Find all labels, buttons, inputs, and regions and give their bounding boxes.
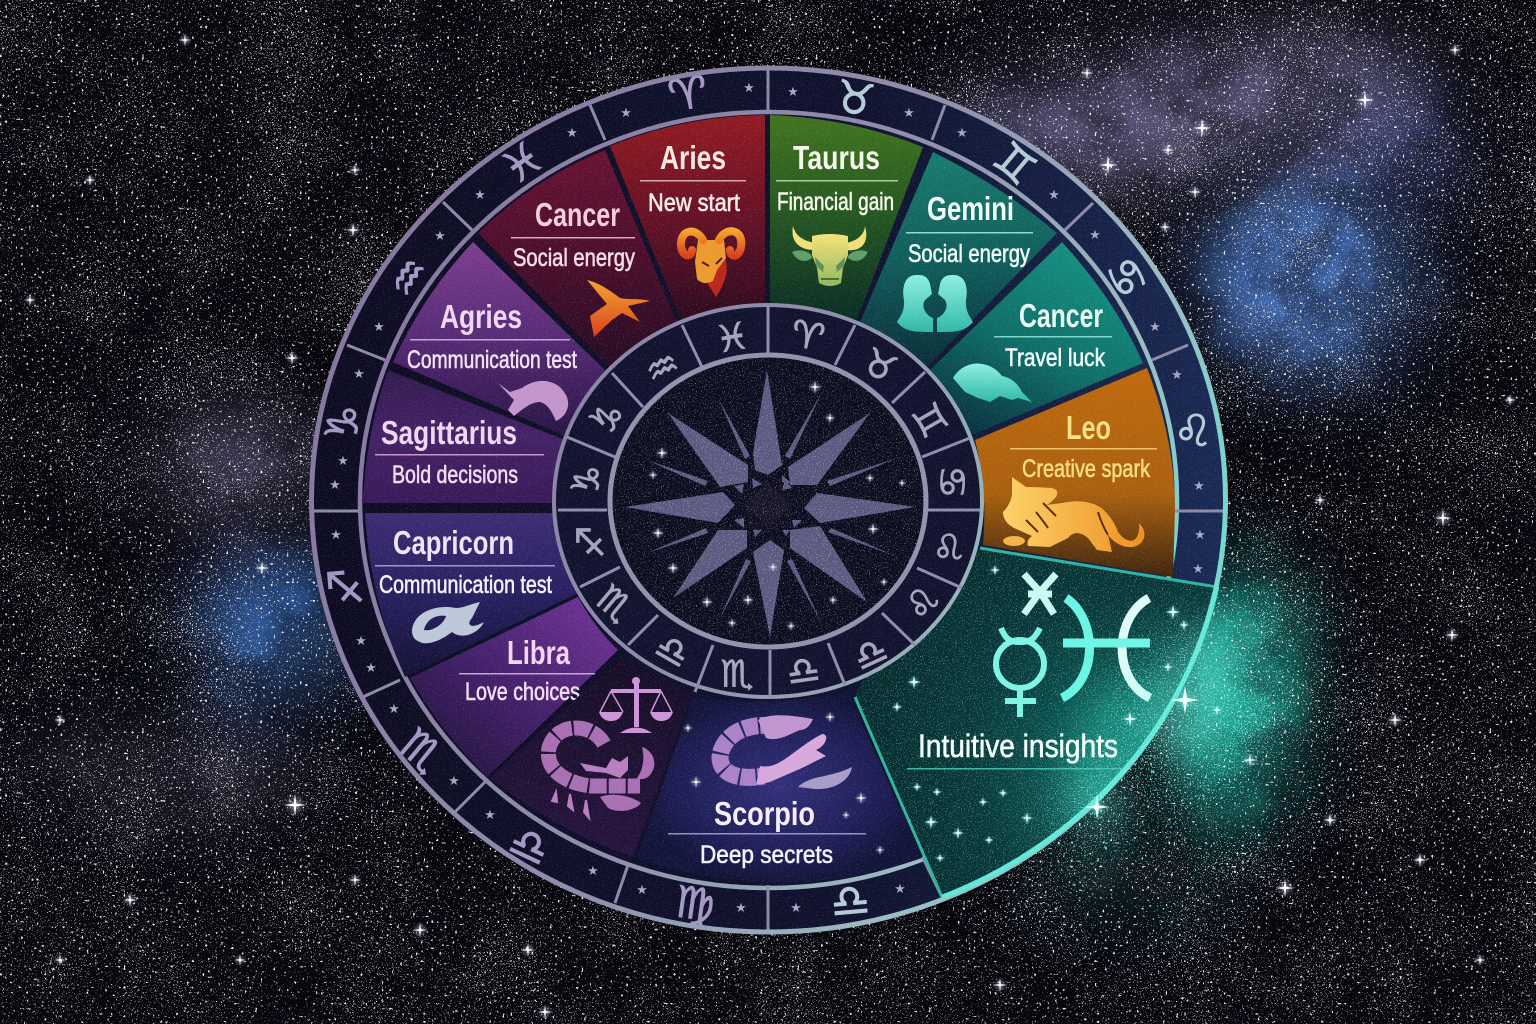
segment: Scorpio: Deep secrets xyxy=(700,841,833,869)
segment: Scorpio: Scorpio xyxy=(714,795,815,832)
middle ring zodiac glyphs: ♑ xyxy=(581,391,634,446)
outer glyph ring: ★ xyxy=(620,106,632,121)
segment: Cancer (teal): Travel luck xyxy=(1005,344,1105,372)
outer ring zodiac glyphs: ♋ xyxy=(1094,248,1158,308)
middle ring zodiac glyphs: ♌ xyxy=(927,524,970,574)
icon: lobster xyxy=(720,715,852,789)
outer glyph ring: ★ xyxy=(787,85,799,100)
middle ring zodiac glyphs: ♏ xyxy=(720,652,754,695)
outer glyph ring: ★ xyxy=(587,864,599,879)
segment: Sagittarius: Sagittarius xyxy=(381,414,517,451)
outer glyph ring xyxy=(312,66,1226,933)
outer ring zodiac glyphs: ♓ xyxy=(492,131,554,195)
segment: Scorpion xyxy=(490,655,692,857)
segment: Cancer (red): Social energy xyxy=(513,244,635,272)
segment: Gemini: Gemini xyxy=(927,190,1014,227)
outer glyph ring: ★ xyxy=(388,702,400,717)
middle ring zodiac glyphs: ♒ xyxy=(638,341,686,394)
outer glyph ring: ★ xyxy=(735,901,747,916)
icon: symbol xyxy=(1024,574,1056,614)
outer glyph ring: ★ xyxy=(790,901,802,916)
middle ring zodiac glyphs: ♌ xyxy=(896,578,950,629)
segment: Agries xyxy=(393,242,607,437)
icon: compass star xyxy=(625,370,915,637)
segment: Capricorn xyxy=(365,513,578,677)
outer glyph ring: ★ xyxy=(1171,368,1183,383)
middle glyph ring xyxy=(554,305,982,698)
segment: Cancer (red): Cancer xyxy=(535,196,620,233)
icon: mercury xyxy=(996,628,1044,717)
segment: Taurus: Taurus xyxy=(793,139,880,176)
outer glyph ring: ★ xyxy=(330,528,342,543)
outer glyph ring: ★ xyxy=(365,661,377,676)
middle ring zodiac glyphs: ♎ xyxy=(846,627,894,680)
segment: Gemini xyxy=(860,152,1057,367)
icon: fish xyxy=(953,364,1032,402)
segment: Agries: Communication test xyxy=(407,346,577,374)
middle ring zodiac glyphs: ♊ xyxy=(902,395,956,446)
segment: Aries: New start xyxy=(648,189,740,217)
icon: scorpion xyxy=(548,728,654,818)
outer glyph ring: ★ xyxy=(434,229,446,244)
outer glyph ring: ★ xyxy=(355,634,367,649)
icon: scales xyxy=(599,677,673,733)
outer glyph ring: ★ xyxy=(484,808,496,823)
icon: fox xyxy=(498,381,568,421)
outer glyph ring: ★ xyxy=(373,320,385,335)
outer ring zodiac glyphs: ♎ xyxy=(828,874,872,928)
outer ring zodiac glyphs: ♉ xyxy=(831,71,879,128)
outer ring zodiac glyphs: ♍ xyxy=(672,876,718,932)
outer glyph ring: ★ xyxy=(474,188,486,203)
segment: Leo: Leo xyxy=(1066,409,1111,446)
central disc with compass star xyxy=(610,355,926,647)
icon: gemini twins xyxy=(897,275,973,332)
middle ring zodiac glyphs: ♎ xyxy=(647,624,698,678)
segment: Leo xyxy=(975,368,1175,577)
outer glyph ring: ★ xyxy=(903,106,915,121)
teal nebula sparkles xyxy=(310,67,1312,933)
segment: Taurus xyxy=(770,115,923,320)
icon: winged figure xyxy=(587,280,650,337)
segment: Taurus: Financial gain xyxy=(777,188,894,216)
icon: ram head xyxy=(681,231,741,297)
segment: Capricorn: Communication test xyxy=(379,571,552,599)
middle ring zodiac glyphs: ♓ xyxy=(712,314,752,362)
outer ring zodiac glyphs: ♐ xyxy=(319,565,373,609)
outer glyph ring: ★ xyxy=(1048,188,1060,203)
icon: pisces xyxy=(1062,598,1150,698)
middle ring zodiac glyphs: ♋ xyxy=(931,465,974,499)
outer glyph ring: ★ xyxy=(1149,320,1161,335)
middle ring zodiac glyphs: ♎ xyxy=(784,647,823,694)
outer glyph ring: ★ xyxy=(566,126,578,141)
outer glyph ring: ★ xyxy=(956,126,968,141)
middle ring zodiac glyphs: ♑ xyxy=(562,457,614,503)
middle ring zodiac glyphs: ♈ xyxy=(788,312,828,360)
segment: Libra: Love choices xyxy=(465,678,580,706)
outer ring zodiac glyphs: ♊ xyxy=(983,132,1046,196)
segment: Intuitive insights xyxy=(850,540,1230,900)
segment: Cancer (red) xyxy=(478,150,677,370)
zodiac wheel xyxy=(312,66,1230,933)
outer glyph ring: ★ xyxy=(353,367,365,382)
outer glyph ring: ★ xyxy=(1089,228,1101,243)
segment: Cancer (teal): Cancer xyxy=(1019,297,1103,334)
middle ring zodiac glyphs: ♏ xyxy=(588,576,641,631)
outer glyph ring: ★ xyxy=(337,454,349,469)
outer ring zodiac glyphs: ♏ xyxy=(390,719,453,783)
outer glyph ring: ★ xyxy=(636,883,648,898)
outer glyph ring: ★ xyxy=(1192,562,1204,577)
segment: Leo: Creative spark xyxy=(1022,455,1150,483)
segment: Agries: Agries xyxy=(440,298,522,335)
segment: Cancer (teal) xyxy=(930,242,1143,435)
segment: Aries xyxy=(610,115,765,323)
outer glyph ring: ★ xyxy=(894,882,906,897)
segment: Libra: Libra xyxy=(507,634,570,671)
outer glyph ring: ★ xyxy=(1193,479,1205,494)
segment: Scorpio xyxy=(637,692,922,882)
outer ring zodiac glyphs: ♒ xyxy=(377,247,441,308)
segment: Intuitive insights: Intuitive insights xyxy=(918,728,1118,764)
outer ring zodiac glyphs: ♑ xyxy=(315,398,374,449)
outer ring zodiac glyphs: ♈ xyxy=(664,66,712,123)
icon: horned skull xyxy=(412,602,484,643)
outer ring zodiac glyphs: ♎ xyxy=(501,815,558,878)
outer glyph ring: ★ xyxy=(1194,528,1206,543)
wheel outer border xyxy=(312,68,1226,932)
segment: Capricorn: Capricorn xyxy=(393,524,514,561)
segment: Gemini: Social energy xyxy=(908,240,1030,268)
segment: Sagittarius: Bold decisions xyxy=(392,461,518,489)
outer glyph ring: ★ xyxy=(329,478,341,493)
outer glyph ring: ★ xyxy=(448,774,460,789)
segment: Libra xyxy=(410,597,618,777)
middle ring zodiac glyphs: ♐ xyxy=(569,525,612,559)
outer ring zodiac glyphs xyxy=(315,66,1213,932)
middle ring zodiac glyphs xyxy=(562,312,974,695)
label: Aries: Aries xyxy=(660,139,726,176)
icon: bull head xyxy=(792,226,868,286)
icon: lion xyxy=(1003,477,1144,552)
segment: Sagittarius xyxy=(363,370,565,503)
middle ring zodiac glyphs: ♉ xyxy=(856,339,904,392)
outer ring zodiac glyphs: ♌ xyxy=(1173,406,1213,457)
outer glyph ring: ★ xyxy=(743,81,755,96)
